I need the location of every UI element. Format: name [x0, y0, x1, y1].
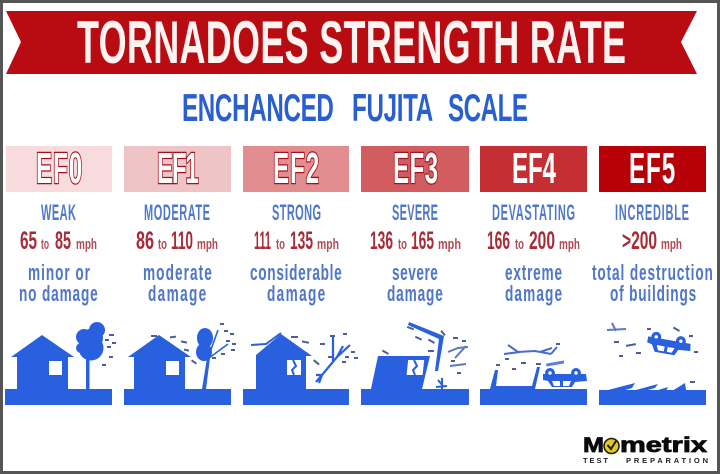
- icon: EF4 destroyed house, branch and overturned car: [480, 343, 587, 405]
- panel: EF4: mph: [559, 236, 580, 253]
- logo check mark: [604, 438, 619, 454]
- logo: Mometrix Test Preparation: M: [583, 434, 604, 457]
- panel: EF3: [361, 143, 469, 306]
- panel: EF1: 110: [171, 227, 193, 255]
- icon: EF1 house and bent tree: [124, 323, 236, 405]
- panel: EF3: EF3: [393, 143, 438, 193]
- panel: EF0: 65: [20, 227, 37, 255]
- panel: EF2: 135: [290, 227, 313, 255]
- panel: EF4: DEVASTATING: [492, 200, 575, 225]
- panel: EF5: EF5: [629, 143, 675, 193]
- panel: EF2: EF2: [273, 143, 319, 193]
- panel: EF3: severe: [392, 260, 438, 285]
- subtitle: ENCHANCED: [182, 86, 334, 129]
- panel: EF2: damage: [267, 281, 325, 306]
- title banner: [6, 10, 697, 76]
- icon: EF3 collapsed house: [361, 322, 469, 405]
- panel: EF5: total destruction: [592, 260, 713, 285]
- panel: EF0: [6, 143, 112, 306]
- panel: EF0: WEAK: [41, 200, 76, 225]
- panel: EF4: 200: [529, 227, 555, 255]
- panel: EF0: EF0: [36, 143, 82, 193]
- panel: EF4: [480, 143, 587, 306]
- icon: EF0 house and tree: [5, 322, 116, 405]
- panel: EF2: to: [276, 236, 285, 253]
- panel: EF5: of buildings: [610, 281, 696, 306]
- panel: EF4: extreme: [505, 260, 562, 285]
- subtitle: SCALE: [448, 86, 528, 129]
- panel: EF3: 165: [411, 227, 434, 255]
- panel: EF0: 85: [55, 227, 71, 255]
- panel: EF3: mph: [438, 236, 461, 253]
- panel: EF3: damage: [387, 281, 443, 306]
- panel: EF2: STRONG: [272, 200, 321, 225]
- panel: EF0: no damage: [19, 281, 98, 306]
- icon: EF5 flying car and debris: [599, 323, 706, 405]
- panel: EF4: to: [515, 236, 524, 253]
- panel: EF1: 86: [136, 227, 154, 255]
- subtitle: FUJITA: [352, 86, 433, 129]
- panel: EF5: mph: [661, 236, 682, 253]
- icon: EF2 damaged house and broken tree: [243, 333, 358, 405]
- panel: EF1: to: [158, 236, 167, 253]
- logo: Mometrix Test Preparation: TEST: [583, 456, 608, 465]
- panel: EF0: mph: [76, 236, 97, 253]
- panel: EF2: [243, 143, 349, 306]
- panel: EF5: INCREDIBLE: [615, 200, 689, 225]
- panel: EF0: to: [41, 236, 49, 253]
- panel: EF3: SEVERE: [392, 200, 438, 225]
- panel: EF5: >200: [622, 227, 657, 255]
- panel: EF3: to: [398, 236, 407, 253]
- panel: EF1: damage: [148, 281, 206, 306]
- panel: EF2: mph: [317, 236, 339, 253]
- panel: EF3: 136: [370, 227, 393, 255]
- panel: EF2: 111: [254, 227, 271, 255]
- panel: EF4: damage: [505, 281, 562, 306]
- panel: EF4: 166: [487, 227, 510, 255]
- panel: EF1: EF1: [157, 143, 199, 193]
- panel: EF5: [592, 143, 713, 306]
- logo: Mometrix Test Preparation: metrix: [620, 434, 707, 457]
- subtitle: [182, 86, 528, 129]
- panel: EF4: EF4: [512, 143, 556, 193]
- logo: Mometrix Test Preparation: [583, 434, 708, 465]
- panel: EF1: [124, 143, 231, 306]
- title: TORNADOES STRENGTH RATE: [77, 10, 626, 76]
- panel: EF1: moderate: [143, 260, 212, 285]
- logo: Mometrix Test Preparation: PREPARATION: [626, 456, 708, 465]
- panel: EF1: mph: [197, 236, 218, 253]
- panel: EF2: considerable: [250, 260, 342, 285]
- panel: EF0: minor or: [28, 260, 90, 285]
- panel: EF1: MODERATE: [144, 200, 210, 225]
